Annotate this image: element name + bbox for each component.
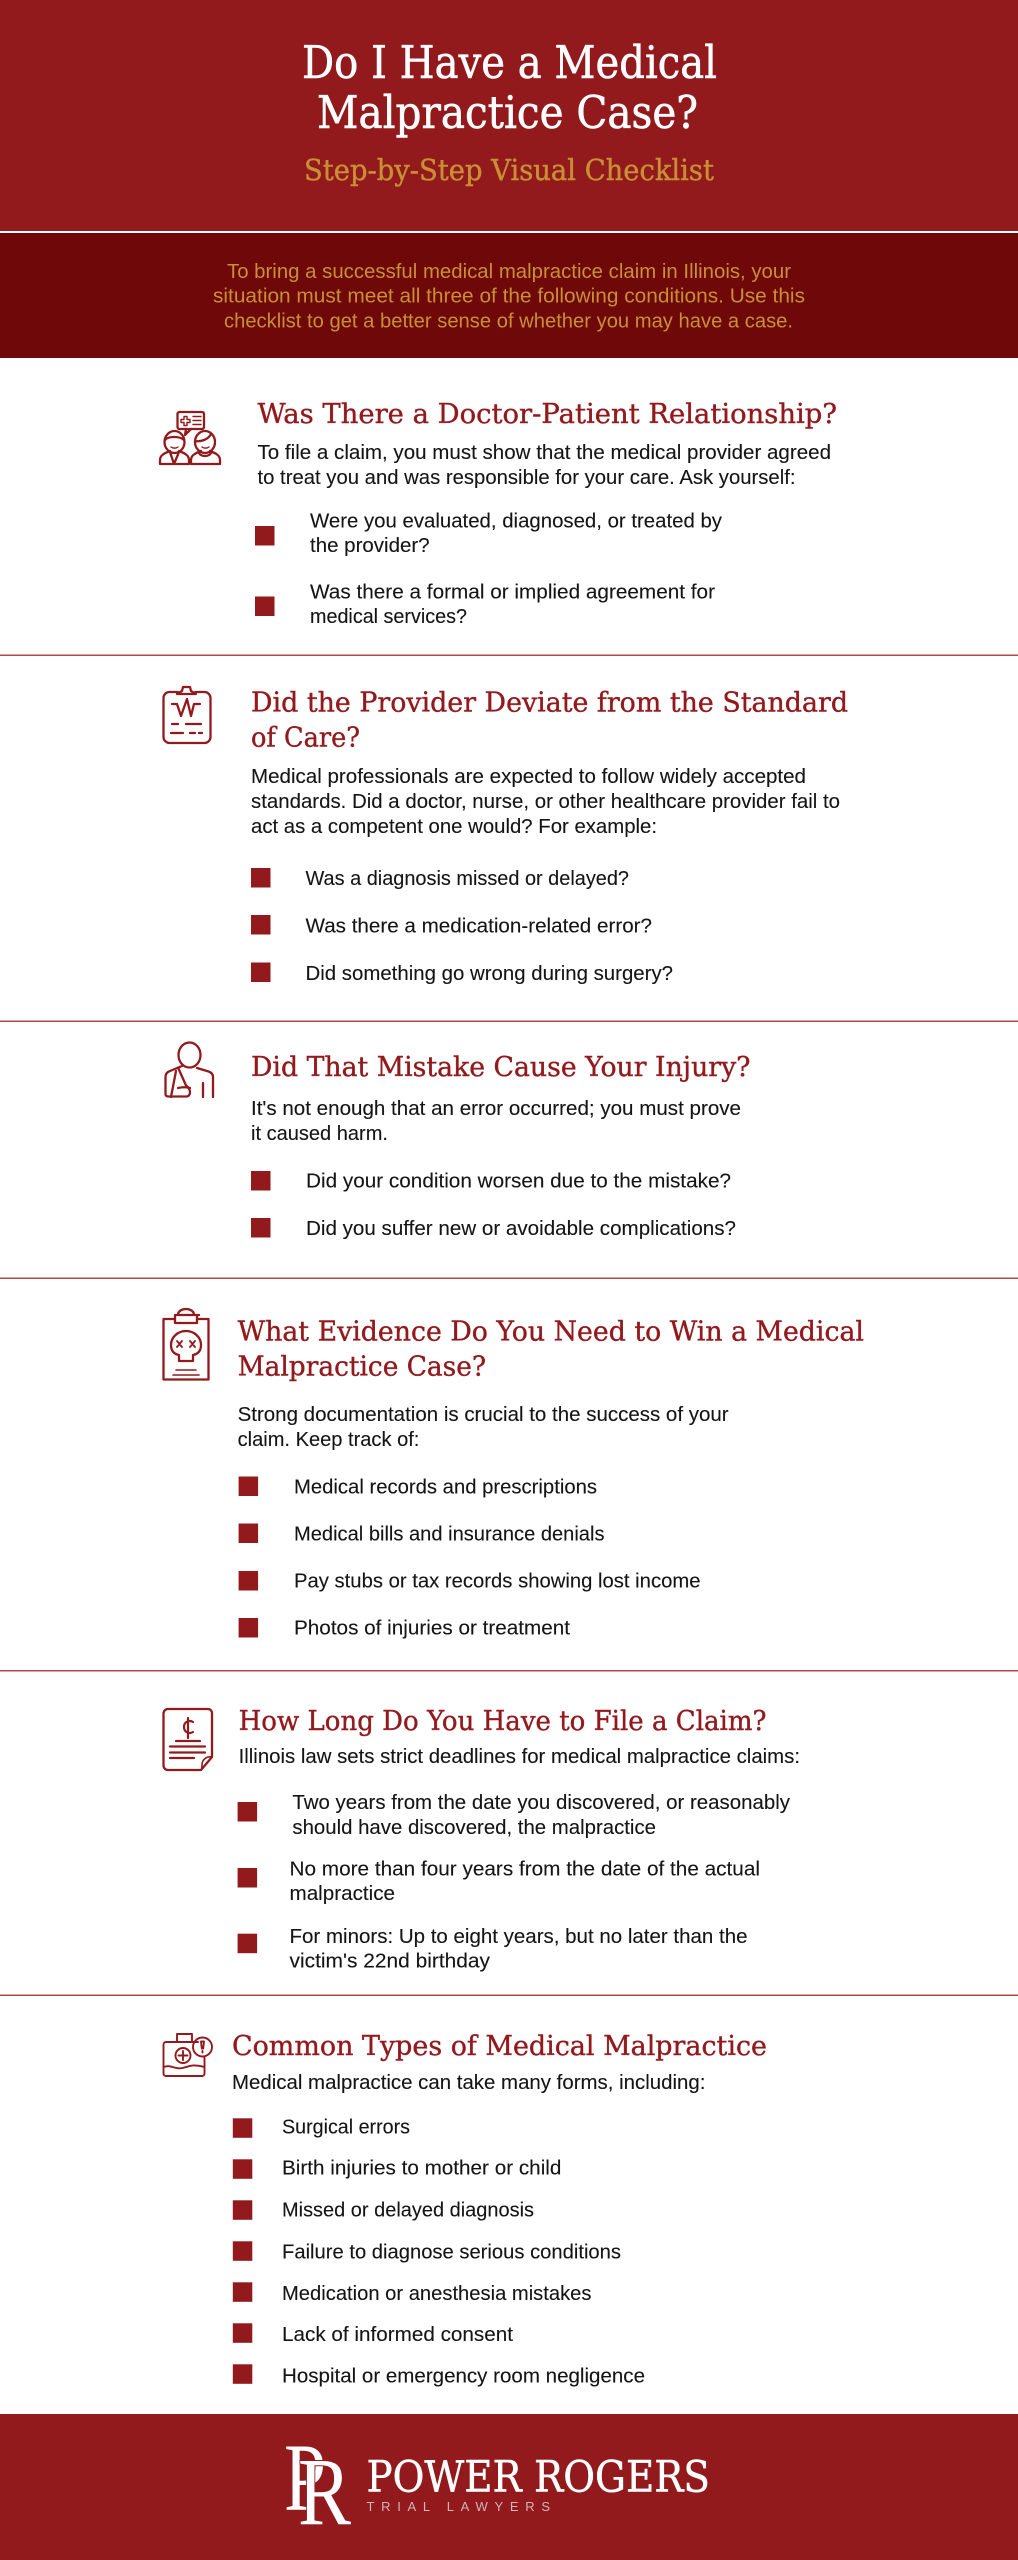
heading: Malpractice Case? <box>238 1351 486 1383</box>
panel: causation <box>166 1042 750 1240</box>
checklist <box>239 1475 700 1640</box>
panel: common types <box>164 2030 767 2388</box>
heading <box>238 1316 864 1383</box>
title: Malpractice Case? <box>317 86 698 139</box>
panel: doctor-patient relationship <box>160 398 837 628</box>
icon: medical bag with alert <box>164 2034 212 2076</box>
checklist: victim's 22nd birthday <box>290 1950 491 1973</box>
text block: Medical professionals are expected to follow widely accepted <box>251 765 806 788</box>
text block: to treat you and was responsible for your care. Ask yourself: <box>258 466 796 489</box>
checklist: should have discovered, the malpractice <box>292 1816 656 1839</box>
text block: standards. Did a doctor, nurse, or other healthcare provider fail to <box>251 790 840 813</box>
text block: it caused harm. <box>251 1122 388 1145</box>
text block: Strong documentation is crucial to the success of your <box>238 1403 729 1426</box>
checklist <box>255 509 723 628</box>
checklist: Hospital or emergency room negligence <box>282 2365 645 2388</box>
intro band: situation must meet all three of the following conditions. Use this <box>213 284 805 308</box>
text block: act as a competent one would? For example: <box>251 815 657 838</box>
title <box>302 36 717 139</box>
icon: clipboard with pulse <box>163 687 211 743</box>
subtitle: Step-by-Step Visual Checklist <box>304 153 714 187</box>
checklist <box>238 1791 791 1973</box>
icon: clipboard with skull <box>164 1309 208 1380</box>
footer <box>0 2414 1018 2560</box>
checklist: Surgical errors <box>282 2116 410 2139</box>
heading: Did That Mistake Cause Your Injury? <box>251 1051 750 1083</box>
icon: document with cent sign <box>164 1709 212 1770</box>
checklist: Photos of injuries or treatment <box>294 1617 570 1640</box>
header banner <box>0 0 1018 231</box>
logo tagline: TRIAL LAWYERS <box>366 2499 550 2514</box>
checklist: malpractice <box>290 1882 395 1905</box>
heading: What Evidence Do You Need to Win a Medical <box>238 1316 864 1348</box>
heading: Common Types of Medical Malpractice <box>232 2030 767 2062</box>
checklist: Was a diagnosis missed or delayed? <box>306 867 629 890</box>
checklist: For minors: Up to eight years, but no later than the <box>290 1925 748 1948</box>
checklist: No more than four years from the date of the actual <box>290 1858 760 1881</box>
checklist: medical services? <box>310 605 467 628</box>
panel: standard of care <box>163 687 848 985</box>
heading: How Long Do You Have to File a Claim? <box>239 1705 767 1737</box>
checklist: Missed or delayed diagnosis <box>282 2199 534 2222</box>
checklist: Did your condition worsen due to the mistake? <box>306 1170 731 1193</box>
icon: person with arm sling <box>166 1042 213 1097</box>
logo monogram: R <box>298 2438 351 2545</box>
checklist: Lack of informed consent <box>282 2323 513 2346</box>
text block: Medical malpractice can take many forms, including: <box>232 2071 705 2094</box>
icon: doctor and patient <box>160 412 220 464</box>
title: Do I Have a Medical <box>302 36 717 89</box>
text block: To file a claim, you must show that the medical provider agreed <box>258 441 831 464</box>
checklist <box>251 1170 736 1240</box>
checklist: Birth injuries to mother or child <box>282 2156 561 2179</box>
intro band <box>0 233 1018 358</box>
intro band: checklist to get a better sense of whether you may have a case. <box>224 310 793 332</box>
checklist: Two years from the date you discovered, or reasonably <box>292 1791 791 1814</box>
checklist <box>233 2116 645 2388</box>
heading <box>251 687 848 754</box>
logo monogram: P <box>284 2424 326 2531</box>
checklist: Did you suffer new or avoidable complications? <box>306 1217 736 1240</box>
intro band: To bring a successful medical malpractice claim in Illinois, your <box>227 260 791 283</box>
checklist: Did something go wrong during surgery? <box>306 962 673 985</box>
panel: evidence <box>164 1309 864 1640</box>
checklist: Medical bills and insurance denials <box>294 1523 604 1546</box>
heading: Was There a Doctor-Patient Relationship? <box>258 398 837 430</box>
checklist: the provider? <box>310 534 430 557</box>
text block: claim. Keep track of: <box>238 1428 419 1451</box>
checklist: Medication or anesthesia mistakes <box>282 2282 592 2305</box>
checklist: Was there a medication-related error? <box>306 915 652 938</box>
checklist: Medical records and prescriptions <box>294 1475 597 1498</box>
heading: of Care? <box>251 722 360 754</box>
checklist: Was there a formal or implied agreement for <box>310 581 715 604</box>
text block: It's not enough that an error occurred; you must prove <box>251 1097 741 1120</box>
text block <box>251 1097 741 1145</box>
heading: Did the Provider Deviate from the Standard <box>251 687 848 719</box>
checklist: Pay stubs or tax records showing lost income <box>294 1570 700 1593</box>
text block <box>238 1403 729 1451</box>
text block: Illinois law sets strict deadlines for medical malpractice claims: <box>239 1745 800 1768</box>
checklist <box>251 867 673 985</box>
text block <box>258 441 831 489</box>
logo wordmark: POWER ROGERS <box>366 2453 710 2503</box>
text block <box>251 765 840 838</box>
checklist: Failure to diagnose serious conditions <box>282 2240 621 2263</box>
panel: filing deadline <box>164 1705 800 1973</box>
checklist: Were you evaluated, diagnosed, or treated by <box>310 509 723 532</box>
